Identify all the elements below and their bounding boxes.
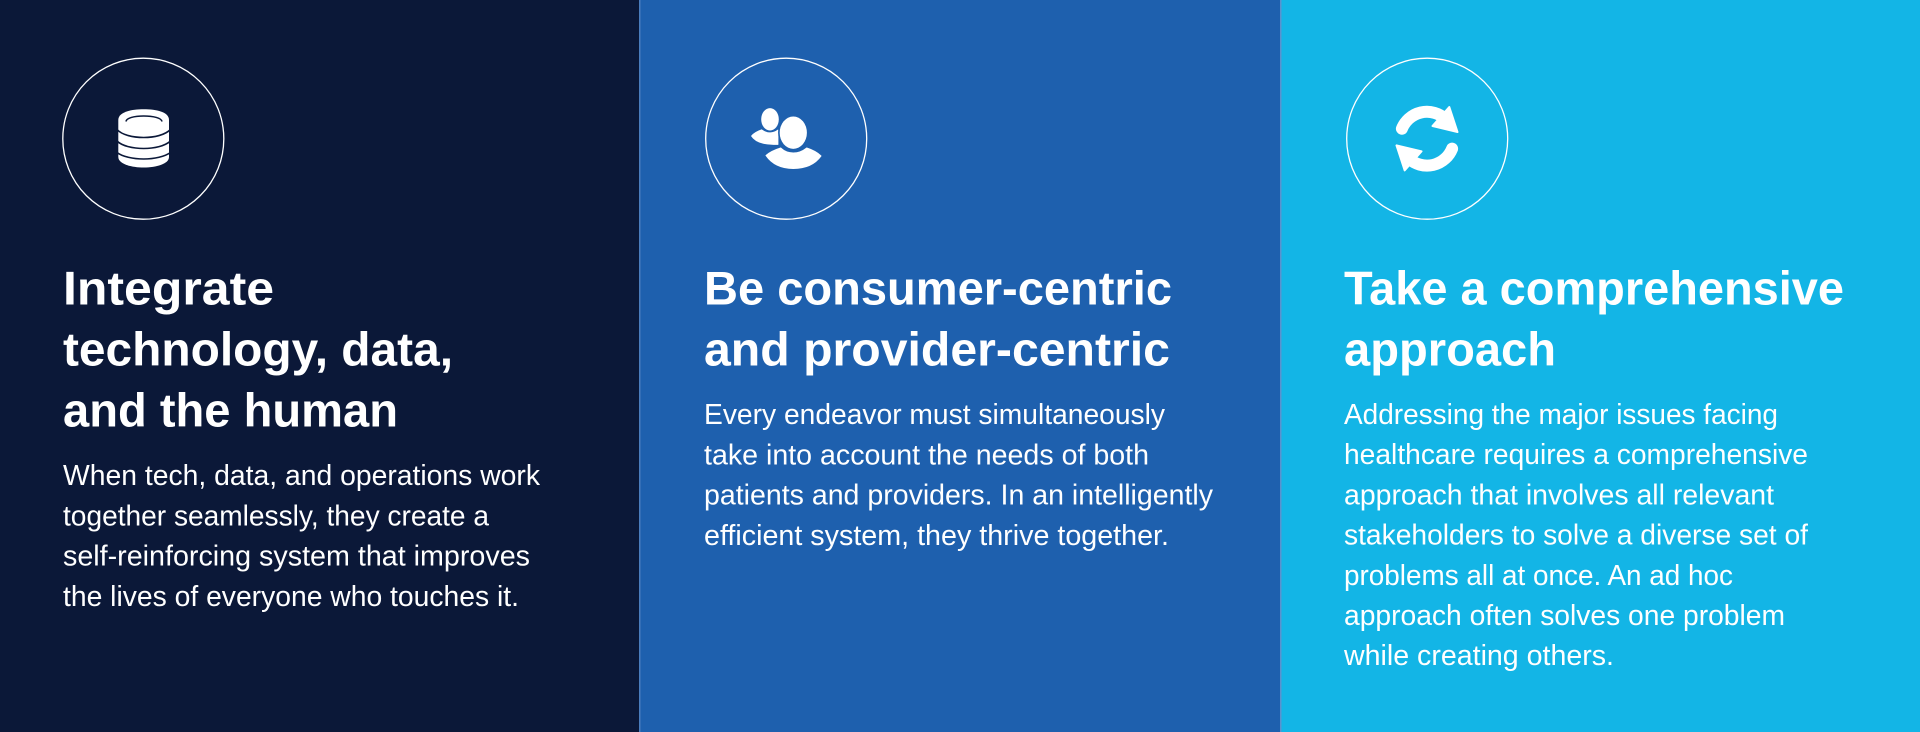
heading: be consumer-centric and provider-centric: and provider-centric — [704, 322, 1170, 376]
icon: refresh arrows in circle — [1347, 58, 1508, 219]
body text: panel 3: stakeholders to solve a diverse set of — [1344, 520, 1808, 552]
body text: panel 2 — [704, 399, 1214, 552]
heading: take a comprehensive approach: Take a comprehensive — [1344, 262, 1844, 314]
body text: panel 1: the lives of everyone who touches it. — [63, 581, 519, 613]
body text: panel 3: while creating others. — [1343, 640, 1614, 672]
body text: panel 1: When tech, data, and operations work — [63, 460, 541, 492]
heading: be consumer-centric and provider-centric — [704, 262, 1172, 376]
panel 1 background — [0, 0, 640, 732]
body text: panel 2: take into account the needs of both — [704, 439, 1149, 471]
body text: panel 2: Every endeavor must simultaneously — [704, 399, 1166, 431]
panel 2 background — [640, 0, 1281, 732]
icon: database in circle — [63, 58, 224, 219]
heading: integrate technology, data, and the human: technology, data, — [63, 322, 453, 376]
panel: be consumer-centric and provider-centric — [639, 0, 1281, 732]
body text: panel 3: approach often solves one problem — [1344, 600, 1785, 632]
heading: integrate technology, data, and the human: Integrate — [63, 262, 274, 314]
body text: panel 3: approach that involves all relevant — [1344, 479, 1774, 511]
heading: be consumer-centric and provider-centric: Be consumer-centric — [704, 262, 1172, 314]
body text: panel 1: self-reinforcing system that improves — [63, 541, 530, 573]
icon: two people in circle — [706, 58, 867, 219]
heading: integrate technology, data, and the human: and the human — [63, 384, 398, 436]
panel: take a comprehensive approach — [1280, 0, 1920, 732]
body text: panel 2: efficient system, they thrive together. — [704, 520, 1169, 552]
panel 3 background — [1281, 0, 1920, 732]
body text: panel 1: together seamlessly, they create a — [63, 500, 489, 532]
panel: integrate technology, data, and the human — [0, 0, 640, 732]
body text: panel 3: healthcare requires a comprehensive — [1344, 439, 1808, 471]
body text: panel 1 — [63, 460, 541, 613]
heading: take a comprehensive approach: approach — [1344, 322, 1556, 376]
body text: panel 3 — [1343, 399, 1808, 672]
body text: panel 3: Addressing the major issues facing — [1344, 399, 1778, 431]
heading: take a comprehensive approach — [1344, 262, 1844, 376]
body text: panel 2: patients and providers. In an intelligently — [704, 480, 1214, 512]
heading: integrate technology, data, and the human — [63, 262, 453, 436]
body text: panel 3: problems all at once. An ad hoc — [1344, 560, 1733, 592]
